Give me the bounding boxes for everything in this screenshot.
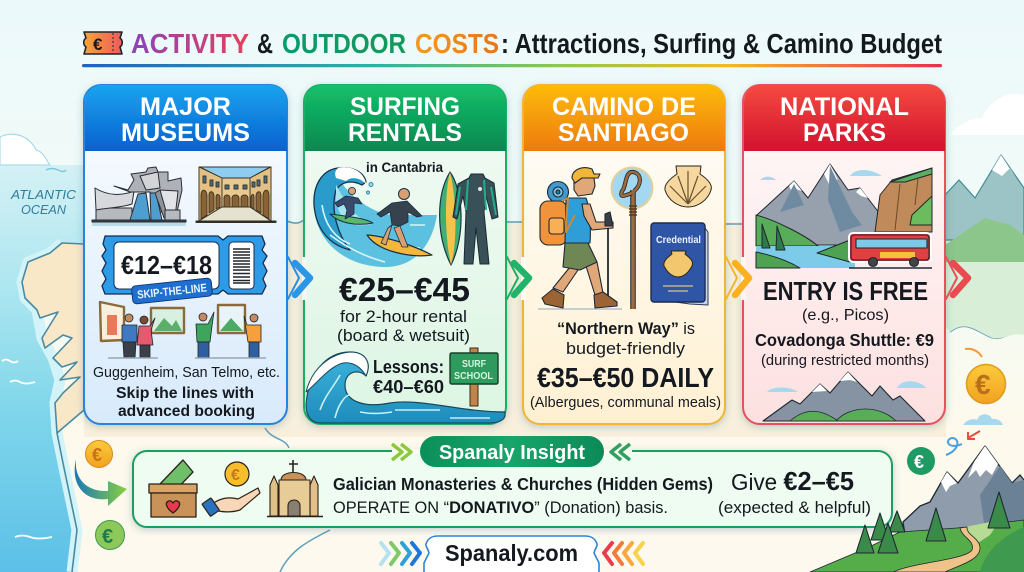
green hill (810, 520, 1024, 572)
bubbles (369, 182, 373, 186)
icon: coin and hand (202, 462, 260, 516)
text: shuttle: Covadonga Shuttle: €9 (755, 330, 934, 350)
footer: spanaly.com (381, 536, 643, 572)
coin gold: € (92, 445, 102, 465)
panel: spanaly insight (133, 436, 892, 527)
scribble (946, 438, 962, 455)
text: rental details: for 2-hour rental (340, 307, 467, 326)
person orange (244, 314, 261, 358)
dark hill (980, 527, 1024, 572)
arrow: red chevron (946, 257, 968, 299)
background: coast halo (22, 243, 77, 572)
icon: pilgrim staff (612, 168, 652, 309)
background: land behind panels (84, 222, 946, 437)
insight frame (133, 451, 892, 527)
icon: donation box (149, 460, 197, 517)
icon: euro ticket (84, 32, 122, 54)
card frame (304, 85, 506, 424)
footer text: Spanaly.com (445, 540, 578, 566)
text: operate on donativo: OPERATE ON “DONATIVO” (Donation) basis. (333, 498, 668, 517)
heading (348, 93, 462, 147)
icon: mountains lake and cliff (756, 164, 932, 268)
heading: PARKS (803, 119, 886, 147)
icon: credential passport (651, 223, 708, 305)
text: rental details (337, 307, 470, 345)
barcode (233, 249, 250, 283)
arrow red (968, 431, 980, 439)
path (893, 527, 980, 572)
label: atlantic ocean (10, 188, 77, 217)
footer plate (424, 536, 599, 572)
coin gold large: € (975, 369, 991, 400)
heading: CAMINO DE (552, 93, 696, 121)
chevrons left (392, 444, 411, 460)
icon: credential passport: Credential (656, 234, 701, 246)
background: right cloud (950, 94, 1024, 135)
panel: major museums (84, 85, 287, 424)
text: give amount: Give €2–€5 (731, 466, 854, 496)
text: tip: advanced booking (118, 403, 255, 420)
pill: spanaly insight (420, 436, 604, 467)
text: northern way: “Northern Way” is (557, 320, 695, 338)
icon: courtyard (196, 167, 276, 223)
surfer small (330, 214, 373, 224)
panel: surfing rentals (304, 85, 506, 424)
icon: bus (849, 233, 932, 268)
surfer big (398, 188, 410, 200)
background: right mountains (945, 155, 1024, 262)
icon: big wave (306, 352, 505, 423)
text: lessons: Lessons: (373, 357, 444, 377)
badge: skip the line: SKIP-THE-LINE (137, 282, 208, 302)
person pink (137, 316, 155, 358)
price: €12–€18 (121, 250, 212, 280)
coin green: € (102, 526, 113, 548)
decoration: bottom right landscape (810, 446, 1024, 572)
icon: gallery visitors (100, 302, 266, 358)
text: northern way: budget-friendly (566, 340, 686, 358)
text: northern way (557, 320, 695, 358)
arrow: orange chevron (726, 257, 749, 300)
surfboard under surfer (367, 235, 432, 256)
price ticket (102, 236, 267, 294)
text: tip: Skip the lines with (116, 385, 254, 402)
text: picos: (e.g., Picos) (802, 307, 889, 324)
barrel (314, 168, 366, 250)
arrow: green chevron (507, 257, 529, 300)
card frame (743, 85, 945, 424)
background: river lines (265, 220, 1024, 572)
background: coast line (57, 433, 77, 572)
arc orange (965, 349, 982, 357)
background: right hills (945, 215, 1024, 338)
icon: church (267, 460, 323, 516)
pill: spanaly insight: Spanaly Insight (439, 442, 585, 464)
heading (121, 93, 250, 147)
heading: SANTIAGO (558, 119, 689, 147)
icon: surf school sign: SURF (462, 359, 486, 370)
text: tip (116, 385, 255, 420)
arrow: blue chevron (288, 257, 310, 300)
title: subtitle: : Attractions, Surfing & Camino Budget (501, 28, 942, 59)
price: €35–€50 DAILY (537, 362, 714, 393)
heading (552, 93, 696, 147)
text: in cantabria: in Cantabria (366, 160, 443, 175)
title: costs: COSTS (415, 28, 499, 59)
background: atlantic ocean (0, 165, 84, 572)
cloud blue (963, 414, 1003, 425)
icon: hiker (538, 168, 622, 309)
title: outdoor: OUTDOOR (282, 28, 406, 59)
icon: surf school sign (450, 348, 498, 406)
light hill patch (965, 520, 1000, 545)
decoration: left coins and arrow (75, 440, 127, 550)
heading: RENTALS (348, 119, 462, 147)
heading (780, 93, 909, 147)
text: expected and helpful: (expected & helpful) (718, 498, 871, 517)
coin green small: € (914, 452, 924, 472)
heading: SURFING (350, 93, 460, 121)
background: spanish land (22, 243, 84, 433)
icon: scallop shell (665, 166, 711, 207)
heading: NATIONAL (780, 93, 909, 121)
text: restricted months: (during restricted months) (761, 352, 929, 369)
panel: camino de santiago (523, 85, 725, 424)
title: ampersand: & (257, 28, 273, 59)
background: small wave mark (46, 168, 66, 172)
background: whitecaps (2, 360, 52, 538)
text: albergues: (Albergues, communal meals) (530, 394, 721, 411)
icon: euro ticket: € (93, 35, 103, 54)
badge: skip the line (131, 278, 213, 304)
card frame (523, 85, 725, 424)
heading: MAJOR (140, 93, 231, 121)
water (314, 180, 437, 267)
footer chevrons right (604, 543, 643, 564)
arrow: green curved (75, 459, 127, 506)
heading: MUSEUMS (121, 119, 250, 147)
icon: surfboard (440, 172, 461, 265)
title underline (82, 64, 942, 67)
mountains (903, 446, 1024, 535)
label: atlantic ocean: OCEAN (21, 203, 67, 217)
panel: national parks (743, 85, 945, 424)
icon: small mountains (763, 372, 926, 421)
card frame (84, 85, 287, 424)
person blue (122, 314, 137, 358)
decoration: right coins and scribble (907, 349, 1006, 475)
icon: wetsuit (453, 174, 498, 264)
text: lessons (373, 357, 444, 397)
icon: coin and hand: € (231, 467, 240, 484)
footer chevrons left (381, 543, 420, 564)
person green (196, 312, 214, 358)
price: €25–€45 (339, 271, 470, 308)
frame gap behind pill (392, 449, 632, 454)
chevrons right (611, 444, 630, 460)
text: entry is free: ENTRY IS FREE (763, 276, 928, 306)
text: galician monasteries: Galician Monasteries & Churches (Hidden Gems) (333, 474, 713, 494)
title: activity: ACTIVITY (131, 28, 249, 59)
background: cloud left (0, 134, 50, 165)
text: rental details: (board & wetsuit) (337, 326, 470, 345)
text: lessons: €40–€60 (373, 377, 444, 397)
trees (856, 492, 1010, 553)
text: venues: Guggenheim, San Telmo, etc. (93, 364, 280, 381)
icon: wave and surfers (314, 167, 437, 267)
icon: guggenheim (92, 167, 186, 226)
title (82, 28, 942, 67)
label: atlantic ocean: ATLANTIC (10, 188, 77, 202)
icon: surf school sign: SCHOOL (454, 371, 493, 382)
